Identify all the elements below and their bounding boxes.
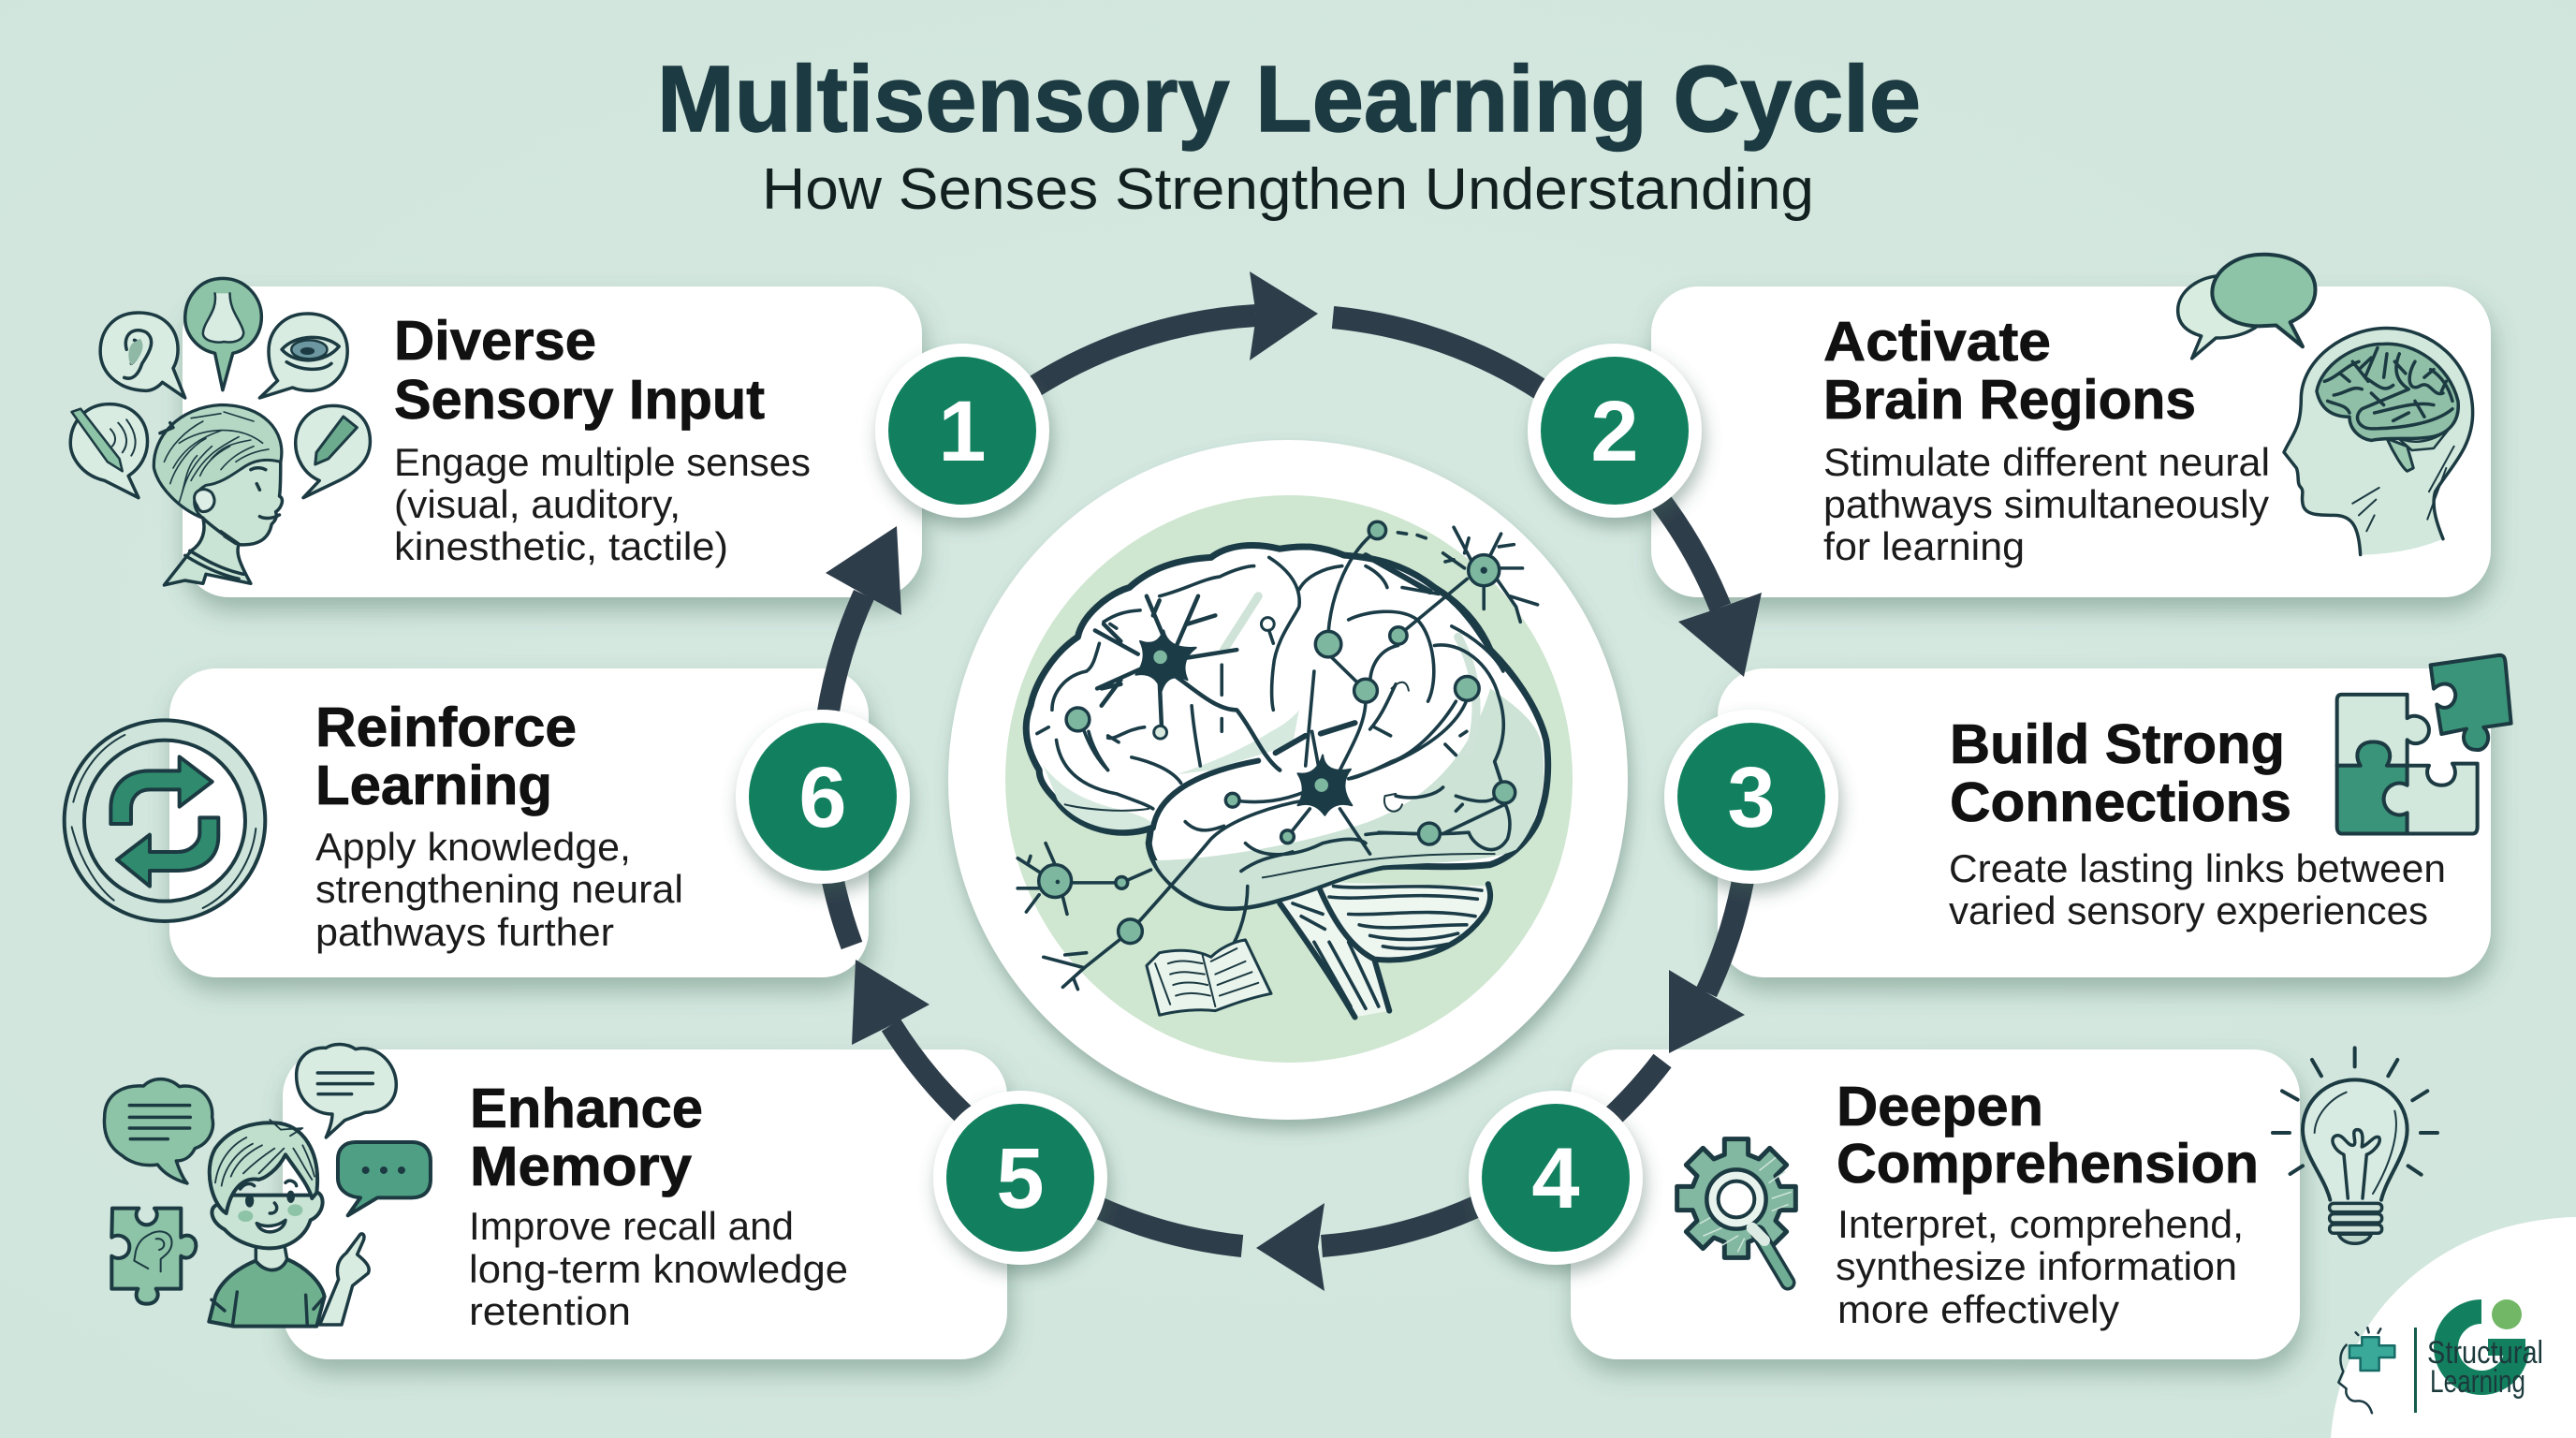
number badge 6: 6: [798, 750, 847, 845]
icon: head with brain and speech bubbles: [2178, 255, 2473, 555]
card 1 description: (visual, auditory,: [394, 482, 681, 526]
card 5 description: Improve recall and: [469, 1204, 794, 1248]
card 1 heading: Sensory Input: [394, 369, 765, 431]
number badge 4: 4: [1531, 1131, 1580, 1226]
card 3 description: Create lasting links between: [1949, 846, 2446, 890]
card 1: Diverse Sensory Input: [183, 286, 922, 597]
card 6: Reinforce Learning: [169, 668, 869, 977]
cycle arrow bottom: [117, 817, 218, 887]
logo mark: [2446, 1299, 2525, 1383]
boy face: [210, 1120, 323, 1269]
logo wordmark: Structural: [2427, 1335, 2543, 1371]
number badge 2: [1528, 344, 1702, 518]
bulb rays: [2273, 1048, 2437, 1175]
shirt: [209, 1259, 325, 1327]
number badge 4: [1469, 1091, 1643, 1265]
ear bubble: [100, 313, 185, 398]
cerebellum and stem: [1280, 882, 1490, 1018]
card 2 heading: Brain Regions: [1823, 369, 2196, 431]
card 4 heading: Comprehension: [1837, 1133, 2259, 1195]
outer neurons: [1017, 527, 1538, 914]
cycle arrows ring: [824, 271, 1762, 1291]
piece bottom-right: [2384, 764, 2478, 834]
card 3 heading: Build Strong: [1950, 713, 2285, 775]
piece loose: [2431, 655, 2511, 750]
card 6 description: Apply knowledge,: [315, 825, 631, 869]
number badge 6: [736, 710, 910, 884]
card 4 heading: Deepen: [1837, 1076, 2043, 1137]
screw base: [2330, 1203, 2382, 1243]
number badge 1: [875, 344, 1049, 518]
card 3 heading: Connections: [1950, 771, 2291, 833]
number badge 2: 2: [1590, 384, 1639, 479]
card 2 description: Stimulate different neural: [1823, 440, 2270, 484]
card 3: Build Strong Connections: [1718, 668, 2491, 977]
card 4 description: more effectively: [1837, 1287, 2119, 1331]
logo: Structural Learning: [2338, 1299, 2543, 1413]
title: Multisensory Learning Cycle: [657, 47, 1921, 152]
piece bottom-left: [2337, 741, 2408, 834]
speech bubbles: [2178, 255, 2315, 359]
neuron A: [1095, 596, 1280, 770]
card 6 heading: Learning: [315, 755, 552, 816]
nose bubble: [185, 278, 261, 390]
large bubble: [104, 1079, 212, 1183]
logo icon: head with cross: [2338, 1328, 2394, 1413]
icon: boy with sense bubbles: [70, 278, 370, 585]
logo divider: [2414, 1328, 2417, 1413]
card 5: Enhance Memory: [283, 1049, 1007, 1359]
open book: [1147, 940, 1271, 1015]
upper bubble: [297, 1044, 396, 1137]
card 5 description: retention: [469, 1289, 631, 1333]
icon: reinforce cycle: [65, 720, 265, 921]
card 2 heading: Activate: [1823, 311, 2051, 373]
card 5 heading: Enhance: [470, 1078, 703, 1139]
card 3 description: varied sensory experiences: [1949, 888, 2428, 932]
puzzle piece: [111, 1209, 196, 1304]
card 2 description: for learning: [1823, 524, 2025, 568]
arm and pointing hand: [320, 1234, 369, 1325]
card 6 description: pathways further: [315, 910, 614, 954]
card 1 description: Engage multiple senses: [394, 440, 811, 484]
number badge 5: 5: [996, 1131, 1045, 1226]
card 2 description: pathways simultaneously: [1823, 482, 2269, 526]
cerebrum outline: [1026, 545, 1548, 907]
brain shading: [1155, 688, 1544, 906]
icon: boy with speech bubbles and puzzle: [104, 1044, 431, 1327]
brain in head: [2317, 344, 2458, 471]
card 4 description: Interpret, comprehend,: [1837, 1202, 2244, 1246]
sound pencil bubble: [70, 404, 148, 498]
bulb glass: [2303, 1079, 2408, 1200]
card 5 heading: Memory: [470, 1136, 692, 1197]
filament: [2333, 1130, 2379, 1198]
dots bubble: [338, 1142, 431, 1215]
neuron B network: [1044, 521, 1515, 990]
subtitle: How Senses Strengthen Understanding: [762, 157, 1814, 222]
icon: light bulb: [2273, 1048, 2437, 1243]
icon: puzzle pieces: [2337, 655, 2511, 834]
number badge 3: [1664, 710, 1838, 884]
number badge 5: [933, 1091, 1107, 1265]
number badge 3: 3: [1727, 750, 1776, 845]
central brain medallion: [948, 440, 1628, 1120]
eye bubble: [259, 314, 347, 398]
card 6 heading: Reinforce: [315, 697, 577, 758]
head silhouette: [2284, 328, 2473, 555]
number badge 1: 1: [938, 384, 987, 479]
card 2: Activate Brain Regions: [1651, 286, 2491, 597]
card 1 heading: Diverse: [394, 310, 596, 372]
card 4: Deepen Comprehension: [1571, 1049, 2300, 1359]
icon: gear with magnifier: [1677, 1139, 1795, 1283]
logo wordmark: Learning: [2430, 1364, 2525, 1400]
card 1 description: kinesthetic, tactile): [394, 524, 728, 568]
sulci lines: [1153, 555, 1490, 829]
card 6 description: strengthening neural: [315, 867, 683, 911]
logo corner panel: [2331, 1217, 2576, 1438]
pencil bubble: [296, 405, 370, 498]
boy profile: [154, 405, 282, 585]
card 5 description: long-term knowledge: [469, 1247, 848, 1291]
brain illustration: [1017, 521, 1548, 1018]
piece top-left: [2337, 695, 2429, 766]
cycle arrow top: [110, 756, 212, 824]
card 4 description: synthesize information: [1836, 1244, 2237, 1288]
